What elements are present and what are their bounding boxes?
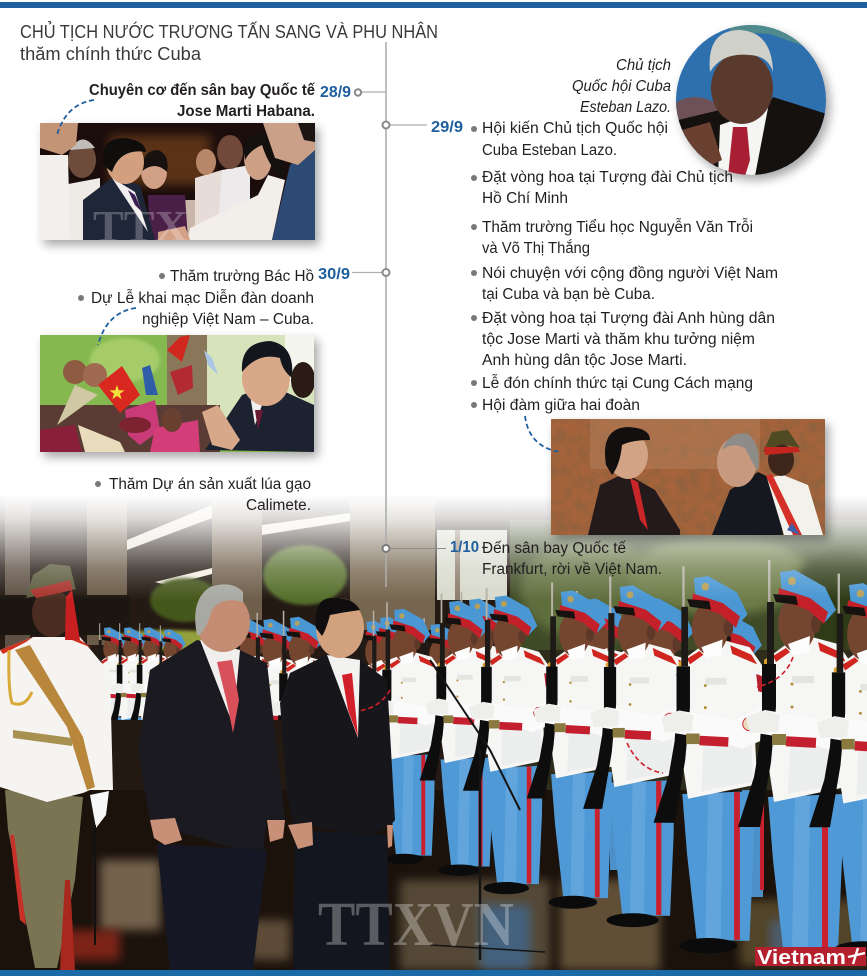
1/10 text: Đến sân bay Quốc tế xyxy=(482,540,626,557)
29/9 activity list: Đặt vòng hoa tại Tượng đài Chủ tịch xyxy=(482,169,733,186)
top bar xyxy=(0,2,867,8)
photo: arrival at Habana airport: TTX xyxy=(93,202,188,251)
title xyxy=(20,21,438,64)
rear rank trouser legs xyxy=(610,790,764,897)
30/9 text: Dự Lễ khai mạc Diễn đàn doanh xyxy=(91,290,314,307)
caption: Esteban Lazo xyxy=(572,57,671,116)
bottom bar xyxy=(0,970,867,976)
date labels: 1/10 xyxy=(450,539,479,556)
28/9 text: Chuyên cơ đến sân bay Quốc tế xyxy=(89,82,315,99)
date labels: 28/9 xyxy=(320,84,351,101)
1/10 text xyxy=(482,540,662,578)
lobby background xyxy=(0,490,867,800)
1/10 text: Frankfurt, rời về Việt Nam. xyxy=(482,561,662,578)
29/9 activity list xyxy=(471,120,778,414)
29/9 activity list: Hội kiến Chủ tịch Quốc hội xyxy=(482,120,668,137)
dashed connector: 29/9 xyxy=(525,416,560,452)
photo: children with flags greeting the President: ★ xyxy=(109,385,125,402)
date labels xyxy=(318,84,479,556)
portrait: Esteban Lazo xyxy=(669,25,830,180)
microphone stand xyxy=(430,660,545,960)
caption: Esteban Lazo: Esteban Lazo. xyxy=(580,99,671,116)
30/9 text: Thăm trường Bác Hồ xyxy=(170,268,314,285)
29/9 activity list: Thăm trường Tiểu học Nguyễn Văn Trỗi xyxy=(482,219,753,236)
photo: children with flags greeting the President xyxy=(40,335,315,452)
photo: arrival at Habana airport xyxy=(40,123,315,251)
title: CHỦ TỊCH NƯỚC TRƯƠNG TẤN SANG VÀ PHU NHÂN xyxy=(20,21,438,42)
29/9 activity list: và Võ Thị Thắng xyxy=(482,240,590,257)
caption: Esteban Lazo: Quốc hội Cuba xyxy=(572,78,671,95)
29/9 activity list: tại Cuba và bạn bè Cuba. xyxy=(482,286,655,303)
caption: Esteban Lazo: Chủ tịch xyxy=(616,57,671,74)
dashed connector: 28/9 xyxy=(57,100,94,135)
timeline axis xyxy=(352,42,446,587)
30/9 text: nghiệp Việt Nam – Cuba. xyxy=(142,311,314,328)
dashed callout lines on main photo xyxy=(358,657,793,773)
date labels: 29/9 xyxy=(431,119,463,136)
Trương Tấn Sang xyxy=(280,598,395,970)
Raúl Castro xyxy=(138,584,285,970)
29/9 activity list: Nói chuyện với cộng đồng người Việt Nam xyxy=(482,265,778,282)
29/9 activity list: Đặt vòng hoa tại Tượng đài Anh hùng dân xyxy=(482,310,775,327)
left officer xyxy=(0,564,113,970)
28/9 text: Jose Marti Habana. xyxy=(177,103,315,120)
29/9 activity list: Lễ đón chính thức tại Cung Cách mạng xyxy=(482,375,753,392)
28/9 text xyxy=(89,82,315,120)
logo: Vietnam+ xyxy=(755,947,866,969)
watermark TTXVN: TTXVN xyxy=(318,891,514,959)
background soldiers xyxy=(98,591,762,720)
29/9 activity list: Cuba Esteban Lazo. xyxy=(482,142,617,159)
Calimete text: Calimete. xyxy=(246,497,311,514)
floor with reflections xyxy=(0,790,867,970)
main photo: guard of honour review xyxy=(0,490,867,970)
fade of main photo into white xyxy=(0,495,867,600)
dashed connector: 30/9 xyxy=(98,308,136,345)
29/9 activity list: tộc Jose Marti và thăm khu tưởng niệm xyxy=(482,331,755,348)
29/9 activity list: Hồ Chí Minh xyxy=(482,190,568,207)
30/9 text xyxy=(78,268,314,328)
logo: Vietnam+: Vietnam xyxy=(757,947,846,969)
29/9 activity list: Hội đàm giữa hai đoàn xyxy=(482,397,640,414)
date labels: 30/9 xyxy=(318,266,350,283)
29/9 activity list: Anh hùng dân tộc Jose Marti. xyxy=(482,352,687,369)
front rank soldiers xyxy=(367,560,867,963)
Calimete text: Thăm Dự án sản xuất lúa gạo xyxy=(109,476,311,493)
photo: talks between the two delegations xyxy=(551,419,825,535)
title: thăm chính thức Cuba xyxy=(20,44,202,64)
Calimete text xyxy=(95,476,311,514)
